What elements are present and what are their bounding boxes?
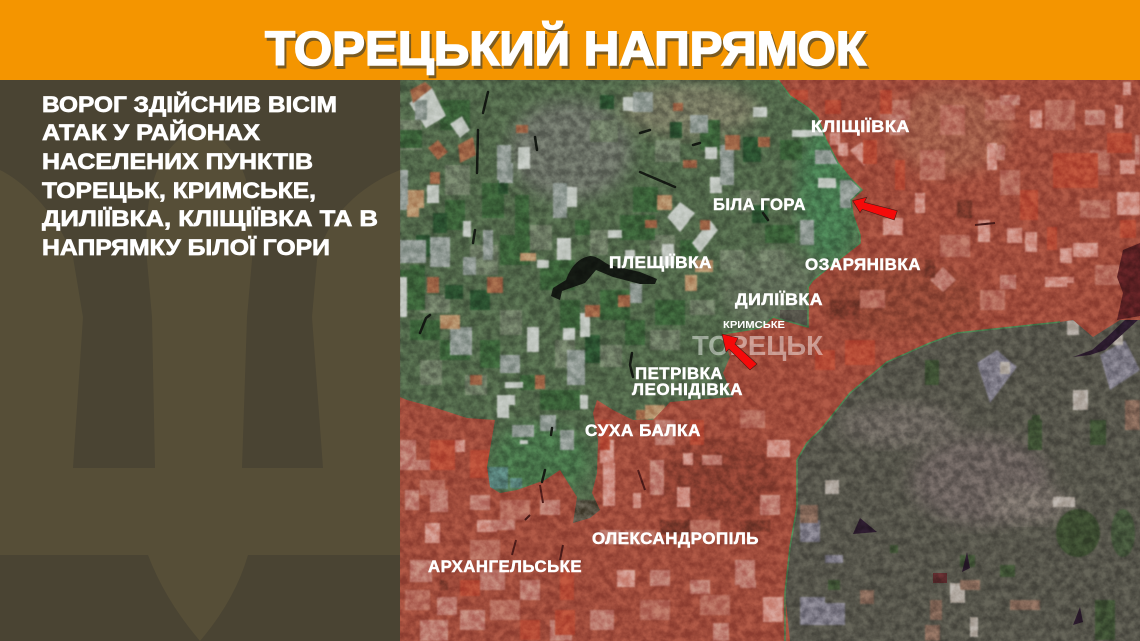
noise texture	[400, 80, 1140, 641]
green controlled territory	[400, 80, 900, 500]
settlement labels	[428, 118, 921, 576]
settlement labels: ДИЛІЇВКА	[735, 291, 823, 309]
red occupied territory	[400, 80, 1140, 641]
arrow: attack at Krymske	[722, 334, 757, 370]
grey city area	[780, 310, 1140, 641]
description text: ТОРЕЦЬК, КРИМСЬКЕ,	[42, 178, 316, 203]
settlement labels: АРХАНГЕЛЬСЬКЕ	[428, 558, 582, 576]
description text	[42, 92, 378, 260]
header bar	[0, 0, 1140, 80]
description text: НАСЕЛЕНИХ ПУНКТІВ	[42, 149, 313, 174]
description text: ВОРОГ ЗДІЙСНИВ ВІСІМ	[42, 92, 337, 117]
arrow: attack at Bila Hora	[853, 197, 897, 220]
left panel with trident watermark	[0, 80, 400, 641]
description text: НАПРЯМКУ БІЛОЇ ГОРИ	[42, 235, 330, 260]
front line edge	[722, 80, 1060, 641]
settlement labels: ПЛЕЩІЇВКА	[609, 254, 712, 272]
description text: АТАК У РАЙОНАХ	[42, 120, 260, 145]
satellite map	[400, 80, 1140, 641]
settlement labels: ОЗАРЯНІВКА	[805, 256, 921, 274]
settlement labels: СУХА БАЛКА	[585, 422, 701, 440]
title: ТОРЕЦЬКИЙ НАПРЯМОК	[265, 21, 867, 76]
dark water bodies	[420, 92, 768, 482]
settlement labels: БІЛА ГОРА	[713, 196, 806, 214]
settlement labels: КЛІЩІЇВКА	[811, 118, 910, 136]
settlement labels: ЛЕОНІДІВКА	[632, 381, 743, 399]
settlement labels: ОЛЕКСАНДРОПІЛЬ	[592, 530, 759, 548]
settlement labels: КРИМСЬКЕ	[723, 319, 785, 331]
description text: ДИЛІЇВКА, КЛІЩІЇВКА ТА В	[42, 206, 378, 231]
label: Toretsk: ТОРЕЦЬК	[692, 330, 824, 361]
settlement labels: ПЕТРІВКА	[635, 365, 723, 383]
